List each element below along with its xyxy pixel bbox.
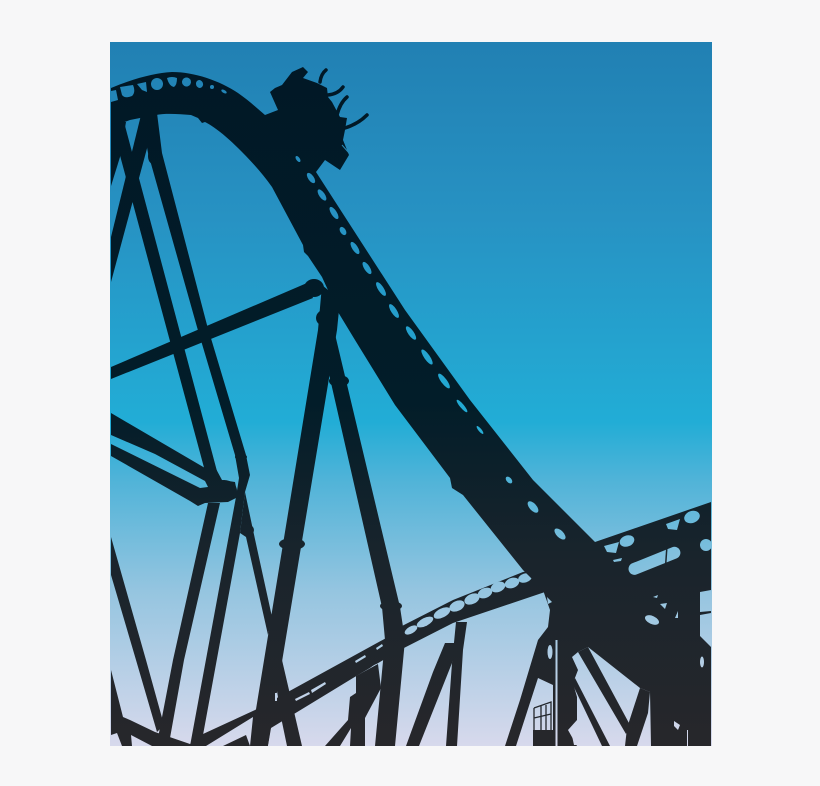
support struts, upper left — [111, 113, 272, 746]
main drop openings — [295, 155, 567, 541]
roller coaster illustration — [110, 42, 712, 746]
diagonal leg right of central support — [277, 660, 302, 746]
top curve openings — [111, 76, 227, 102]
lower left bracing bars — [111, 413, 238, 746]
diagonal cross brace — [111, 279, 324, 379]
lower track openings — [206, 572, 533, 746]
central post openings — [548, 640, 577, 746]
coaster riders raised arms — [320, 70, 367, 128]
track tie openings — [111, 76, 712, 746]
coaster silhouette — [111, 67, 712, 746]
track divider line on long opening — [665, 549, 667, 563]
sky background panel — [110, 42, 712, 746]
sky gaps in bracing bars — [111, 435, 208, 488]
central tall support legs — [250, 285, 405, 746]
maintenance platform cage — [533, 702, 553, 746]
struts beneath right mass — [572, 647, 650, 746]
car lap bar sliver — [342, 145, 349, 153]
lower rising track — [190, 568, 548, 746]
upper right track openings — [547, 509, 712, 746]
main track and lower mass — [111, 67, 711, 746]
small supports under lower track — [325, 622, 467, 746]
